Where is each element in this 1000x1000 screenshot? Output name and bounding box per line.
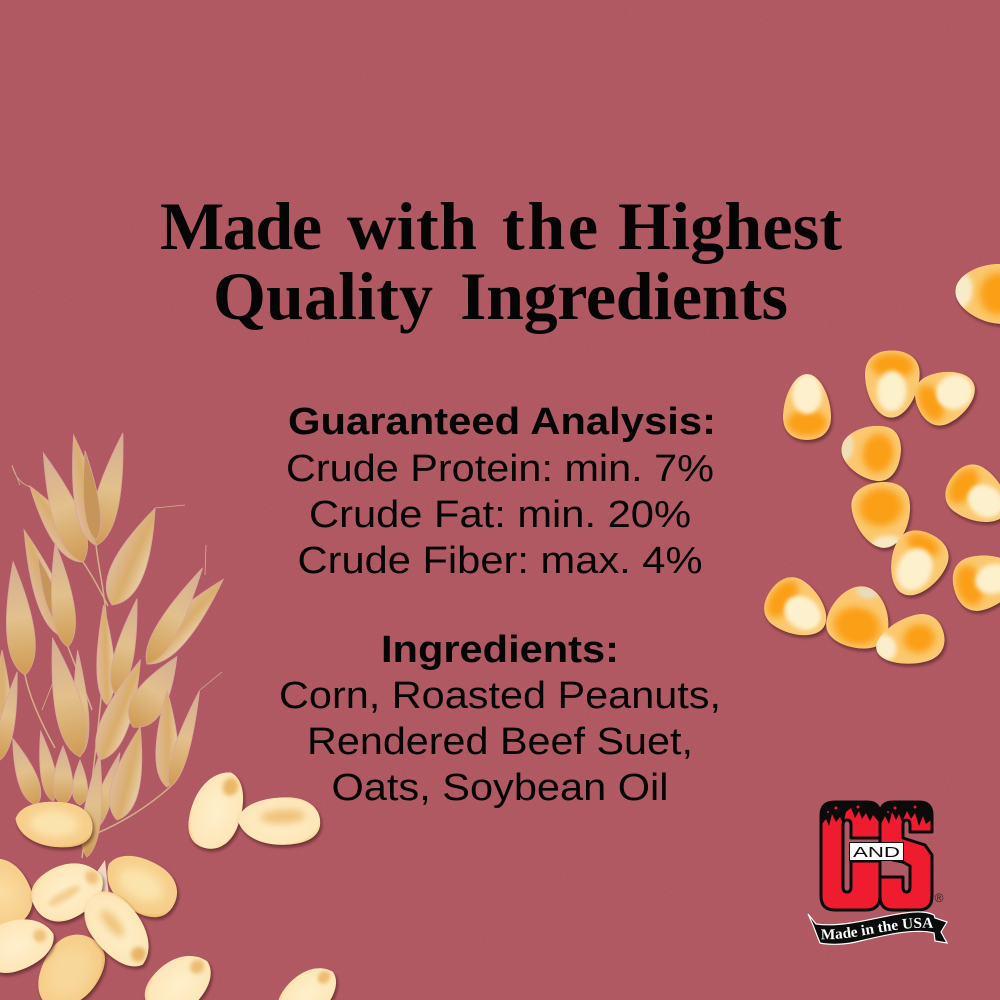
logo: C and S Made in the USA [808,800,948,945]
peanut skin between peanuts [88,860,110,915]
corn kernel H [952,556,1000,615]
text block: ingredients: Oats, Soybean Oil [332,767,668,809]
logo banner: Made in the USA [821,918,934,940]
text block: guaranteed analysis: Guaranteed Analysis: [288,401,716,443]
icon: peanuts [0,765,347,1000]
corn kernel top right [955,264,1000,328]
icon: corn kernels [755,260,1000,673]
text block: guaranteed analysis: Crude Fiber: max. 4% [298,540,702,582]
logo letter S [880,802,932,910]
text block: ingredients [279,629,721,809]
corn kernel B [863,349,921,419]
corn kernel A [783,374,831,440]
logo AND box [850,842,904,861]
corn kernel F [891,530,952,600]
peanut 2 [188,772,246,853]
text block: ingredients: Corn, Roasted Peanuts, [279,675,721,717]
corn kernel C [914,372,978,430]
text block: guaranteed analysis: Crude Fat: min. 20% [309,494,691,536]
title: Quality [213,258,433,334]
peanut 4 [0,858,35,925]
corn kernel I [764,577,828,640]
peanut 11 [278,968,340,1000]
text block: guaranteed analysis [286,401,716,582]
logo banner [808,911,948,945]
peanut 1 [14,800,94,849]
oat stems [12,465,222,858]
corn kernel K [876,614,948,668]
logo letter C [821,802,880,910]
peanut 6 [106,856,180,922]
title: with [347,188,477,264]
logo registered mark: ® [935,891,944,905]
peanut 9 [38,934,108,1000]
corn kernel J [826,586,892,653]
peanut 7 [0,919,58,978]
text block: ingredients: Ingredients: [381,629,619,671]
peanut 10 [144,956,214,1000]
text block: ingredients: Rendered Beef Suet, [307,721,693,763]
logo AND box: AND [853,844,900,861]
corn kernel D [841,426,904,484]
peanut 3 [237,795,321,847]
title: the [502,188,598,264]
title: Highest [618,188,842,264]
corn kernel E [851,482,914,552]
oat spikelets [0,430,234,858]
title [160,188,842,334]
title: Ingredients [460,258,788,334]
peanut 8 [84,892,152,970]
corn kernel G [945,464,1000,526]
icon: oat stalk [0,430,234,858]
title: Made [160,188,322,264]
peanut 5 [30,863,106,926]
text block: guaranteed analysis: Crude Protein: min. 7% [286,448,714,490]
